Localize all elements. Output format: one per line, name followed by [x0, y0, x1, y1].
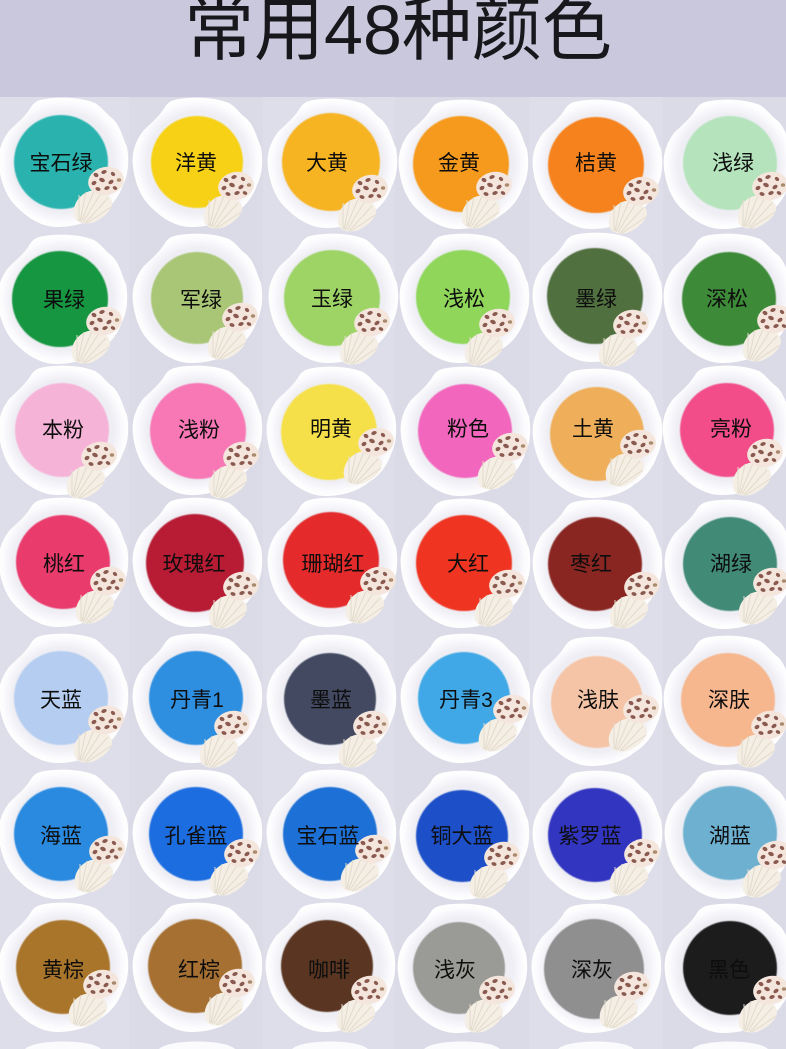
swatch: 土黄 [533, 369, 662, 498]
swatch: 玉绿 [269, 234, 398, 365]
swatch: 本粉 [0, 366, 128, 499]
swatch: 红棕 [133, 903, 262, 1032]
swatch: 洋黄: 洋黄 [175, 152, 217, 175]
swatch: 大黄: 大黄 [306, 152, 348, 175]
swatch: 孔雀蓝: 孔雀蓝 [164, 825, 228, 848]
swatch: 桃红: 桃红 [43, 553, 85, 576]
swatch: 浅肤: 浅肤 [577, 689, 619, 712]
swatch: 丹青1: 丹青1 [170, 689, 224, 712]
swatch: 深灰: 深灰 [571, 959, 613, 982]
swatch: 深松 [664, 234, 786, 363]
row 3 [0, 366, 786, 499]
swatch: 孔雀蓝 [133, 770, 263, 899]
swatch: 大红: 大红 [447, 553, 489, 576]
swatch: 深灰 [532, 904, 661, 1033]
swatch: 咖啡: 咖啡 [308, 959, 350, 982]
swatch: 本粉: 本粉 [42, 419, 84, 442]
swatch: 丹青3 [401, 634, 532, 763]
swatch: 紫罗蓝 [533, 771, 663, 900]
swatch: 海蓝: 海蓝 [40, 825, 82, 848]
swatch: 天蓝: 天蓝 [40, 689, 82, 712]
swatch: 浅绿 [664, 100, 786, 229]
swatch: 深肤: 深肤 [708, 689, 750, 712]
row 4 [0, 498, 786, 629]
swatch: 果绿 [0, 235, 127, 364]
swatch: 墨蓝: 墨蓝 [310, 689, 352, 712]
swatch: 宝石绿: 宝石绿 [30, 152, 92, 175]
swatch: 金黄: 金黄 [438, 152, 480, 175]
swatch: 洋黄 [133, 98, 262, 229]
swatch: 浅绿: 浅绿 [712, 152, 754, 175]
swatch: 浅灰: 浅灰 [434, 959, 476, 982]
swatch: 桔黄: 桔黄 [575, 152, 617, 175]
swatch: 军绿: 军绿 [180, 289, 222, 312]
swatch: 浅肤 [533, 637, 662, 766]
swatch: 玫瑰红 [133, 498, 262, 629]
swatch: 浅松 [400, 234, 529, 366]
row 5 [0, 634, 786, 768]
swatch: 湖蓝: 湖蓝 [709, 825, 751, 848]
swatch: 深松: 深松 [706, 288, 748, 311]
swatch: 土黄: 土黄 [572, 418, 614, 441]
swatch: 大红 [401, 499, 530, 628]
swatch: 珊瑚红 [268, 498, 399, 627]
swatch: 桔黄 [533, 100, 662, 234]
swatch: 黑色: 黑色 [708, 959, 750, 982]
swatch: 浅粉: 浅粉 [178, 419, 220, 442]
swatch: 铜大蓝 [400, 771, 529, 900]
swatch: 紫罗蓝: 紫罗蓝 [558, 825, 622, 848]
swatch: 宝石蓝 [267, 770, 396, 899]
row 6 [0, 770, 786, 900]
swatch: 湖绿 [665, 500, 786, 629]
swatch: 金黄 [399, 100, 528, 229]
swatch: 玉绿: 玉绿 [311, 288, 353, 311]
swatch: 海蓝 [0, 770, 128, 899]
swatch: 果绿: 果绿 [43, 289, 85, 312]
swatch: 黑色 [665, 904, 786, 1033]
swatch: 桃红 [0, 498, 129, 627]
swatch: 浅松: 浅松 [443, 288, 485, 311]
swatch: 红棕: 红棕 [178, 959, 220, 982]
swatch: 墨蓝 [267, 635, 396, 768]
swatch: 湖绿: 湖绿 [710, 553, 752, 576]
swatch: 明黄 [267, 367, 397, 496]
swatch: 粉色: 粉色 [447, 418, 489, 441]
cropped plates at bottom edge [25, 1042, 768, 1049]
swatch: 丹青1 [133, 634, 262, 768]
row 2 [0, 233, 786, 367]
swatch: 黄棕: 黄棕 [42, 959, 84, 982]
swatch: 咖啡 [266, 903, 395, 1033]
swatch: 铜大蓝: 铜大蓝 [430, 825, 494, 848]
swatch: 浅粉 [133, 366, 262, 499]
swatch: 亮粉: 亮粉 [710, 418, 752, 441]
swatch: 墨绿 [533, 233, 662, 367]
swatch: 湖蓝 [665, 770, 786, 899]
header band [0, 0, 786, 97]
row 1 [0, 98, 786, 234]
swatch: 丹青3: 丹青3 [439, 689, 493, 712]
swatch: 枣红: 枣红 [570, 553, 612, 576]
swatch: 宝石蓝: 宝石蓝 [296, 825, 360, 848]
swatch: 浅灰 [398, 904, 527, 1033]
swatch: 枣红 [533, 500, 663, 629]
column shading [129, 97, 786, 1049]
swatch: 粉色 [401, 367, 531, 496]
swatch: 明黄: 明黄 [310, 418, 352, 441]
swatch: 大黄 [268, 99, 397, 232]
swatch: 黄棕 [0, 903, 128, 1032]
swatch: 深肤 [664, 636, 786, 768]
swatch: 军绿 [133, 234, 262, 363]
row 7 [0, 903, 786, 1033]
swatch: 宝石绿 [0, 98, 128, 227]
swatch: 亮粉 [663, 366, 786, 496]
swatch: 珊瑚红: 珊瑚红 [302, 553, 364, 576]
swatch: 天蓝 [0, 634, 128, 763]
swatch: 玫瑰红: 玫瑰红 [162, 553, 226, 576]
swatch: 墨绿: 墨绿 [575, 288, 617, 311]
